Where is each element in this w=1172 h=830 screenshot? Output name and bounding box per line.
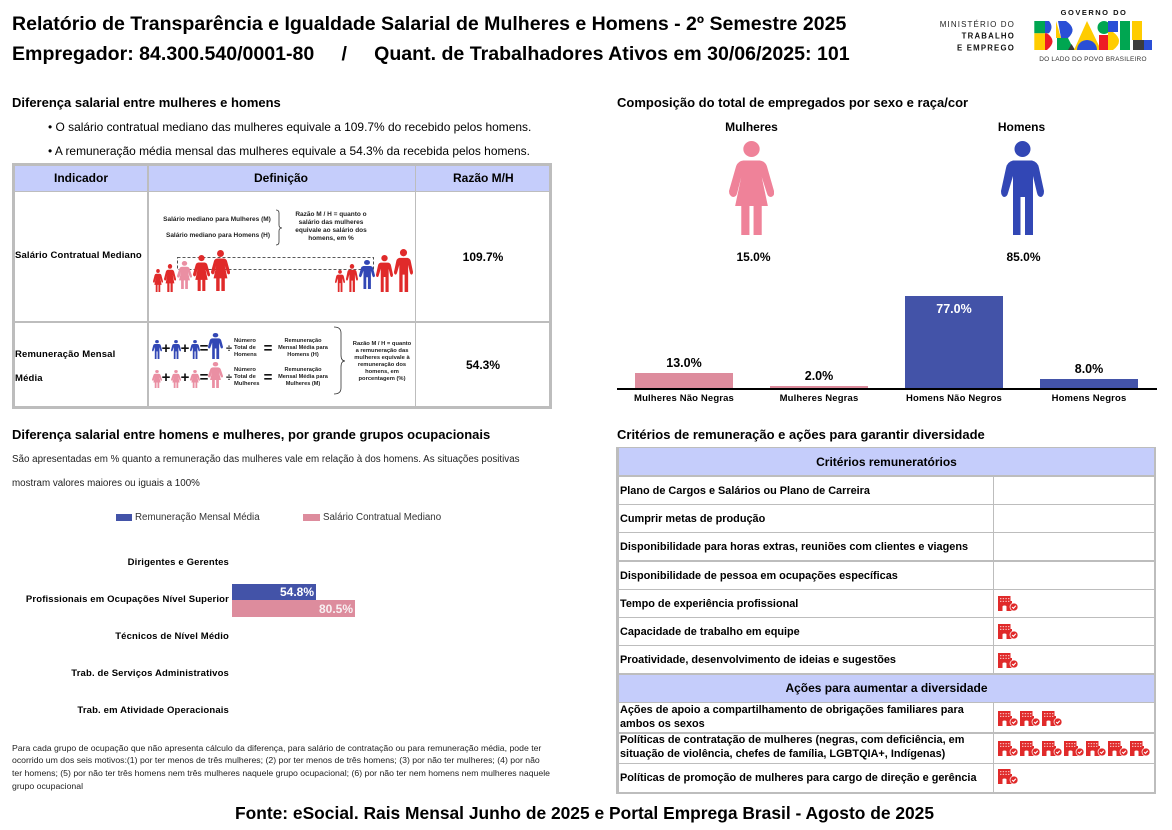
heading: composição: Composição do total de empregados por sexo e raça/cor	[617, 95, 968, 110]
bar chart: sexo e raça: 77.0%	[936, 302, 972, 316]
bar: homens não negros	[905, 296, 1003, 388]
diagram: remuneração média: Mensal Média para	[278, 374, 329, 380]
diagram: salário mediano: Razão M / H = quanto o	[295, 211, 367, 218]
diagram: salário mediano	[153, 210, 413, 292]
diagram: remuneração média: remuneração dos	[358, 362, 406, 368]
diagram: remuneração média: Mulheres (M)	[286, 381, 320, 387]
diagram: remuneração média: Homens (H)	[287, 352, 319, 358]
footnote: grupo ocupacional	[12, 781, 83, 791]
intro text: mostram valores maiores ou iguais a 100%	[12, 478, 200, 489]
diagram: remuneração média: Homens	[234, 352, 257, 358]
diagram: salário mediano: Salário mediano para Homens (H)	[166, 232, 270, 239]
bar chart: sexo e raça: Homens Negros	[1052, 393, 1126, 404]
row label: remuneração: Remuneração Mensal Média	[15, 349, 115, 384]
diagram: salário mediano: Salário mediano para Mulheres (M)	[163, 216, 271, 223]
pictogram: mulheres: 15.0%	[736, 250, 771, 264]
table: critérios e ações: Capacidade de trabalho em equipe	[620, 626, 800, 638]
logo: Governo do Brasil: DO LADO DO POVO BRASILEIRO	[1039, 56, 1147, 63]
icon: proatividade	[998, 653, 1018, 668]
table: critérios e ações: Plano de Cargos e Salários ou Plano de Carreira	[620, 485, 870, 497]
logo: Ministério do Trabalho e Emprego: TRABALHO	[962, 32, 1015, 40]
bar chart: sexo e raça: 2.0%	[805, 369, 833, 383]
icon: promoção	[998, 769, 1018, 784]
bar: remuneração 54.8%	[232, 584, 316, 600]
heading: grupos ocupacionais: Diferença salarial entre homens e mulheres, por grande grupos ocupacionais	[12, 427, 490, 442]
diagram: remuneração média: =	[264, 369, 273, 386]
diagram: remuneração média: ÷	[226, 372, 232, 384]
footnote: ocorrido um dos seis motivos:(1) por ter menos de três mulheres; (2) por ter menos de três homens; (3) por não ter mulheres; (4) por não	[12, 755, 540, 765]
header: critérios remuneratórios	[619, 448, 1154, 475]
table: critérios e ações: Tempo de experiência profissional	[620, 598, 798, 610]
title: Relatório de Transparência e Igualdade Salarial de Mulheres e Homens - 2º Semestre 2025	[12, 13, 846, 35]
bar chart: grupos ocupacionais: Profissionais em Ocupações Nível Superior	[26, 594, 229, 605]
heading: critérios: Critérios de remuneração e ações para garantir diversidade	[617, 427, 985, 442]
icon: capacidade	[998, 624, 1018, 639]
diagram: remuneração média: mulheres equivale à	[354, 355, 410, 361]
bar chart: grupos ocupacionais: Dirigentes e Gerentes	[128, 557, 229, 568]
diagram: remuneração média: +	[162, 369, 171, 386]
bar chart: sexo e raça: 13.0%	[666, 356, 702, 370]
diagram: remuneração média: a remuneração das	[356, 348, 408, 354]
logo: Ministério do Trabalho e Emprego: E EMPREGO	[957, 44, 1015, 52]
diagram: remuneração média: porcentagem (%)	[358, 376, 406, 382]
table: critérios e ações: Políticas de contratação de mulheres (negras, com deficiência, em situação de violência, chefes de família, LGBTQIA+, Indígenas)	[620, 734, 964, 760]
diagram: remuneração média: =	[200, 369, 209, 386]
bar: salário 80.5%: 80.5%	[319, 602, 353, 616]
header: ações	[619, 674, 1154, 702]
intro text: São apresentadas em % quanto a remuneração das mulheres vale em relação à dos homens. As situações positivas	[12, 454, 520, 465]
title: Empregador: 84.300.540/0001-80 / Quant. de Trabalhadores Ativos em 30/06/2025: 101	[12, 43, 850, 65]
bar chart: grupos ocupacionais	[26, 557, 355, 716]
legend	[116, 512, 441, 523]
pictogram: homens: Homens	[998, 120, 1045, 134]
logo: Ministério do Trabalho e Emprego	[940, 20, 1015, 52]
value: 54.3%: 54.3%	[466, 358, 500, 372]
table header: Indicador	[54, 171, 108, 185]
intro text	[12, 454, 520, 489]
bar chart: sexo e raça: Homens Não Negros	[906, 393, 1002, 404]
table: critérios e ações: Disponibilidade para horas extras, reuniões com clientes e viagens	[620, 541, 968, 553]
table: critérios e ações: Proatividade, desenvolvimento de ideias e sugestões	[620, 654, 896, 666]
diagram: salário mediano: homens, em %	[308, 235, 354, 242]
diagram: remuneração média: Total de	[234, 345, 257, 351]
bar chart: sexo e raça: 8.0%	[1075, 362, 1103, 376]
diagram: remuneração média: homens, em	[365, 369, 399, 375]
bar: homens negros	[1040, 379, 1138, 388]
pictogram: homens: 85.0%	[1006, 250, 1041, 264]
header: ações: Ações para aumentar a diversidade	[785, 681, 988, 695]
footer source: Fonte: eSocial. Rais Mensal Junho de 2025 e Portal Emprega Brasil - Agosto de 2025	[235, 803, 934, 823]
pictogram: mulheres	[725, 120, 778, 264]
diagram: remuneração média: +	[162, 340, 171, 357]
bar: salário 80.5%	[232, 600, 355, 617]
icon: tempo de experiência	[998, 596, 1018, 611]
icons: contratação	[998, 741, 1150, 756]
table header: Razão M/H	[453, 171, 514, 185]
diagram: remuneração média: ÷	[226, 343, 232, 355]
table header: Definição	[254, 171, 308, 185]
table: indicadores	[12, 163, 552, 409]
bar chart: sexo e raça	[617, 296, 1157, 404]
diagram: remuneração média: Remuneração	[284, 338, 322, 344]
logo: Governo do Brasil: GOVERNO DO	[1061, 8, 1127, 17]
diagram: salário mediano: equivale ao salário dos	[295, 227, 367, 234]
diagram: remuneração média: Número	[234, 338, 256, 344]
diagram: remuneração média: =	[200, 340, 209, 357]
legend: Salário Contratual Mediano	[323, 512, 441, 523]
footnote: Para cada grupo de ocupação que não apresenta cálculo da diferença, para salário de contratação ou para remuneração média, pode ter	[12, 743, 541, 753]
heading: diferença salarial: Diferença salarial entre mulheres e homens	[12, 95, 281, 110]
table: critérios e ações: Disponibilidade de pessoa em ocupações específicas	[620, 570, 898, 582]
header: critérios remuneratórios: Critérios remuneratórios	[816, 455, 957, 469]
bullet text	[48, 120, 531, 158]
bullet text: • O salário contratual mediano das mulheres equivale a 109.7% do recebido pelos homens.	[48, 120, 531, 134]
diagram: remuneração média: =	[264, 340, 273, 357]
title	[12, 13, 850, 65]
bullet text: • A remuneração média mensal das mulheres equivale a 54.3% da recebida pelos homens.	[48, 144, 530, 158]
diagram: salário mediano: salário das mulheres	[299, 219, 364, 226]
icons: apoio familiar	[998, 711, 1062, 726]
bar chart: sexo e raça: Mulheres Negras	[780, 393, 858, 404]
table: critérios e ações: Cumprir metas de produção	[620, 513, 765, 525]
diagram: remuneração média: +	[181, 340, 190, 357]
legend: Remuneração Mensal Média	[135, 512, 260, 523]
table: critérios e ações	[616, 447, 1156, 793]
diagram: remuneração média	[152, 326, 412, 394]
diagram: remuneração média: Número	[234, 367, 256, 373]
diagram: remuneração média: Total de	[234, 374, 257, 380]
diagram: remuneração média: Mulheres	[234, 381, 259, 387]
pictogram: mulheres: Mulheres	[725, 120, 778, 134]
footnote: ter homens; (5) por não ter três homens nem três mulheres naquele grupo ocupacional; (6) por não ter nem homens nem mulheres naquele	[12, 768, 550, 778]
diagram: remuneração média: +	[181, 369, 190, 386]
bar: remuneração 54.8%: 54.8%	[280, 585, 314, 599]
bar: mulheres negras	[770, 386, 868, 388]
bar chart: sexo e raça: Mulheres Não Negras	[634, 393, 734, 404]
table: critérios e ações: Ações de apoio a compartilhamento de obrigações familiares para ambos os sexos	[620, 704, 964, 730]
bar chart: grupos ocupacionais: Técnicos de Nível Médio	[115, 631, 229, 642]
value: 109.7%: 109.7%	[463, 250, 503, 264]
bar chart: grupos ocupacionais: Trab. em Atividade Operacionais	[77, 705, 229, 716]
pictogram: homens	[998, 120, 1045, 264]
bar chart: grupos ocupacionais: Trab. de Serviços Administrativos	[71, 668, 229, 679]
logo: Ministério do Trabalho e Emprego: MINISTÉRIO DO	[940, 20, 1015, 29]
row label: salário: Salário Contratual Mediano	[15, 250, 142, 261]
diagram: remuneração média: Razão M / H = quanto	[353, 341, 412, 347]
footnote	[12, 743, 550, 791]
logo: Governo do Brasil	[1034, 8, 1152, 63]
diagram: remuneração média: Mensal Média para	[278, 345, 329, 351]
diagram: remuneração média: Remuneração	[284, 367, 322, 373]
table: critérios e ações: Políticas de promoção de mulheres para cargo de direção e gerência	[620, 772, 976, 784]
bar: mulheres não negras	[635, 373, 733, 388]
table header	[15, 166, 549, 191]
